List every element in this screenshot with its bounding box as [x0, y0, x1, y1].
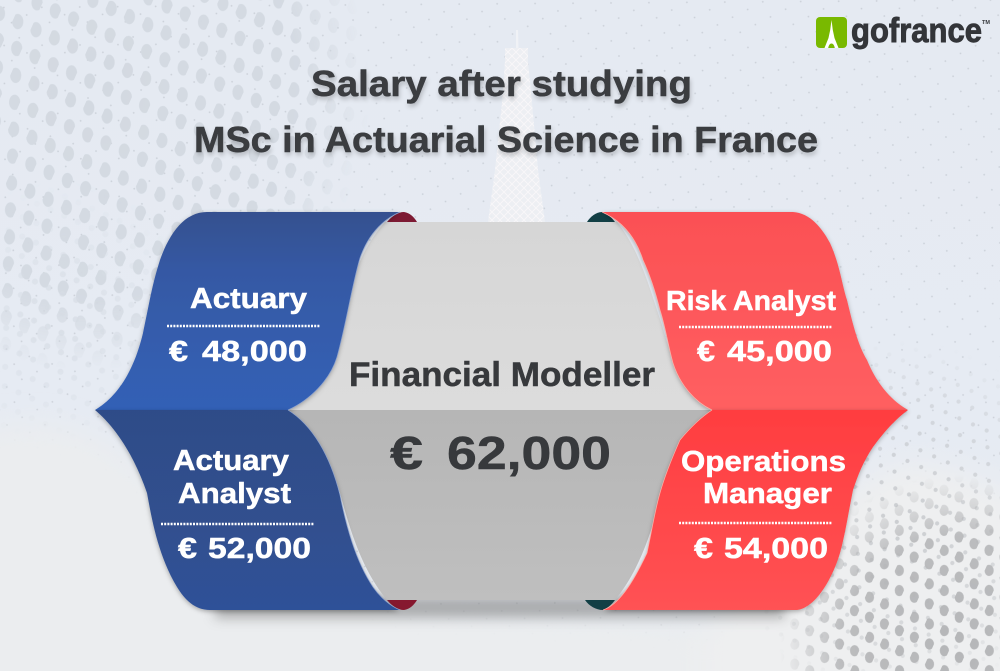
risk analyst divider	[679, 326, 832, 328]
actuary divider	[167, 325, 320, 327]
eiffel tower backdrop	[488, 30, 545, 222]
panel: actuary analyst	[95, 410, 400, 610]
financial modeller salary	[390, 427, 611, 479]
actuary salary: €	[169, 336, 188, 368]
panel: financial modeller	[288, 222, 712, 600]
financial modeller salary: 62,000	[447, 427, 611, 479]
actuary analyst salary: €	[178, 533, 197, 565]
actuary analyst title	[173, 445, 291, 510]
actuary salary	[169, 336, 307, 368]
panel: operations manager	[603, 410, 908, 610]
ribbon fold: dark teal top	[587, 212, 615, 222]
actuary analyst salary	[178, 533, 311, 565]
actuary analyst ribbon	[95, 410, 400, 610]
risk analyst salary	[697, 336, 832, 368]
operations manager title	[681, 446, 846, 510]
panel: actuary	[95, 212, 400, 410]
risk analyst title: Risk Analyst	[666, 285, 836, 316]
operations manager title: Manager	[703, 478, 832, 510]
title line 2: MSc in Actuarial Science in France	[194, 119, 818, 160]
logo wordmark: gofrance	[851, 12, 982, 50]
operations manager salary: €	[694, 533, 713, 565]
logo: gofrance	[816, 12, 990, 50]
operations manager title: Operations	[681, 446, 846, 478]
risk analyst salary: 45,000	[727, 336, 832, 368]
operations manager salary	[694, 533, 828, 565]
operations manager ribbon	[603, 410, 908, 610]
ground shadow under centre panel	[215, 596, 785, 618]
actuary title: Actuary	[190, 283, 307, 315]
operations manager divider	[679, 522, 832, 524]
actuary analyst divider	[161, 523, 314, 525]
title line 1: Salary after studying	[311, 63, 692, 104]
financial modeller label: Financial Modeller	[349, 356, 655, 394]
risk analyst ribbon	[602, 212, 908, 410]
ribbon fold: dark red top	[387, 212, 417, 222]
actuary analyst title: Analyst	[178, 478, 291, 510]
risk analyst salary: €	[697, 336, 715, 368]
actuary salary: 48,000	[202, 336, 307, 368]
financial modeller salary: €	[390, 427, 423, 479]
operations manager salary: 54,000	[724, 533, 828, 565]
title	[194, 63, 818, 160]
trademark: TM	[982, 20, 990, 26]
centre panel lower half	[288, 410, 712, 600]
actuary ribbon	[95, 212, 400, 410]
panel: risk analyst	[602, 212, 908, 410]
ribbon fold: dark red bottom	[387, 600, 417, 610]
actuary analyst salary: 52,000	[208, 533, 311, 565]
logo icon: green square with tower	[816, 17, 847, 48]
centre panel upper half	[288, 222, 712, 410]
actuary analyst title: Actuary	[173, 445, 289, 477]
ribbon fold: dark teal bottom	[585, 600, 615, 610]
